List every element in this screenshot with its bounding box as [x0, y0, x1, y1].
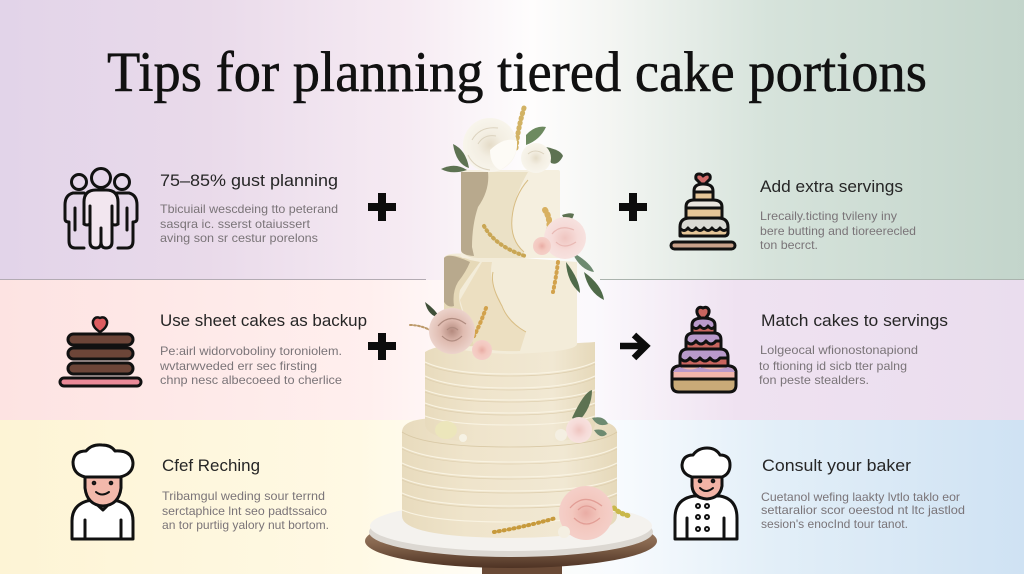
icon: plus — [619, 193, 647, 221]
icon: plus — [368, 333, 396, 360]
heading: Match cakes to servings — [761, 311, 948, 330]
icon: group of people — [65, 168, 137, 248]
body text: serctaphice lnt seo padtssaico — [162, 504, 327, 518]
body text — [159, 344, 342, 387]
panel: consult baker — [675, 448, 965, 539]
icon: sheet cake with cherry — [60, 317, 141, 386]
cream buds — [435, 421, 467, 442]
white roses — [463, 118, 551, 173]
body text: sesion's enocInd tour tanot. — [761, 517, 908, 531]
heading: 75–85% gust planning — [160, 171, 338, 190]
body text: aving son sr cestur porelons — [160, 231, 318, 245]
body text — [162, 489, 329, 532]
body text — [759, 343, 918, 387]
third tier — [425, 342, 595, 445]
body text: Lolgeocal wfionostonapiond — [760, 343, 918, 357]
panel: extra servings — [671, 174, 916, 252]
body text: Pe:airl widorvoboliny toroniolem. — [160, 344, 342, 358]
icon: tiered cake — [671, 174, 735, 249]
cake stand — [365, 501, 657, 574]
illustration: tiered wedding cake — [365, 108, 657, 574]
panel: sheet cakes — [60, 311, 367, 387]
body text: chnp nesc albecoeed to cherlice — [160, 373, 342, 387]
body text — [760, 209, 916, 252]
body text: bere butting and tioreerecled — [760, 224, 916, 238]
top tier — [461, 170, 560, 258]
icon: arrow — [620, 335, 646, 358]
body text: Tbicuiail wescdeing tto peterand — [160, 202, 338, 216]
body text: Lrecaily.ticting tvileny iny — [760, 209, 897, 223]
bottom tier — [402, 418, 617, 538]
gold sprigs — [410, 108, 630, 532]
heading: Use sheet cakes as backup — [160, 311, 367, 330]
body text: sasqra ic. sserst otaiussert — [160, 217, 311, 231]
body text: Tribamgul weding sour terrnd — [162, 489, 325, 503]
panel: chef — [72, 445, 329, 539]
second tier — [444, 254, 577, 354]
leaves — [425, 127, 608, 436]
panel: guest planning — [65, 168, 338, 248]
body text: wvtarwveded err sec firsting — [159, 359, 317, 373]
heading: Consult your baker — [762, 456, 911, 475]
icon: chef with buttons — [675, 448, 737, 539]
body text: fon peste stealders. — [759, 373, 869, 387]
icon: purple tiered cake — [672, 307, 736, 392]
body text: ton becrct. — [760, 238, 818, 252]
title: Tips for planning tiered cake portions — [107, 41, 927, 104]
body text: Cuetanol wefing laakty lvtlo taklo eor — [761, 490, 960, 504]
icon: plus — [368, 193, 396, 221]
body text: to ftioning id sicb tter palng — [759, 359, 907, 373]
body text: settaralior scor oeestod nt ltc jastlod — [761, 503, 965, 517]
body text — [761, 490, 965, 531]
heading: Add extra servings — [760, 177, 903, 196]
body text: an tor purtiig yalory nut bortom. — [162, 518, 329, 532]
pink roses — [429, 217, 613, 540]
icon: chef — [72, 445, 133, 539]
heading: Cfef Reching — [162, 456, 260, 475]
panel: match cakes — [672, 307, 948, 392]
body text — [160, 202, 338, 245]
